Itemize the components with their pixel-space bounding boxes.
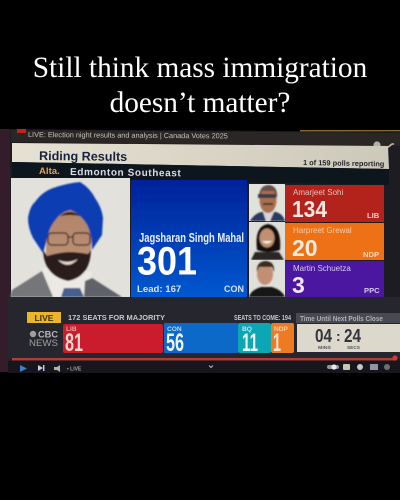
seats to come label: SEATS TO COME: 194 bbox=[234, 315, 291, 322]
title: doesn’t matter? bbox=[110, 87, 290, 119]
timer heading bbox=[296, 313, 400, 323]
header: Riding Results: Riding Results bbox=[39, 149, 127, 164]
panel: TV screen photo bbox=[0, 129, 400, 373]
CBC News logo: NEWS bbox=[29, 338, 58, 348]
glasses bbox=[48, 233, 90, 245]
mouth bbox=[58, 259, 78, 265]
candidate: Amarjeet Sohi: Amarjeet Sohi bbox=[293, 188, 343, 197]
live badge: LIVE bbox=[34, 313, 54, 323]
seat bar: LIB: LIB bbox=[66, 326, 77, 333]
timer heading: Time Until Next Polls Close bbox=[300, 316, 383, 323]
seat bar: BQ: 11 bbox=[242, 329, 258, 357]
candidate: Amarjeet Sohi: 134 bbox=[292, 196, 327, 222]
TV bezel bbox=[0, 129, 400, 373]
player controls strip bbox=[8, 361, 400, 373]
seat bar: NDP bbox=[271, 323, 294, 357]
seat bar: NDP: NDP bbox=[274, 326, 289, 333]
seat bar: NDP: 1 bbox=[273, 329, 281, 357]
face bbox=[46, 210, 92, 279]
jacket left bbox=[10, 271, 53, 297]
live badge bbox=[27, 312, 61, 323]
countdown timer: MINS bbox=[318, 345, 331, 350]
CBC News logo bbox=[29, 328, 58, 348]
countdown timer bbox=[297, 324, 400, 352]
riding name bar: Edmonton Southeast bbox=[70, 167, 182, 179]
candidate: Harpreet Grewal: NDP bbox=[363, 250, 379, 259]
candidate: Amarjeet Sohi: LIB bbox=[367, 211, 380, 220]
winner panel: Lead: 167 bbox=[137, 284, 181, 295]
header: Riding Results: 1 of 159 polls reporting bbox=[303, 158, 385, 168]
winner panel: Jagsharan Singh Mahal bbox=[139, 230, 244, 245]
seat bar: CON bbox=[164, 323, 238, 357]
candidate: Harpreet Grewal: 20 bbox=[292, 235, 318, 261]
seat bar: CON: 56 bbox=[166, 329, 184, 357]
browser tab strip: LIVE: Election night results and analysis | Canada Votes 2025 bbox=[28, 130, 228, 140]
countdown timer: 04 bbox=[315, 326, 332, 346]
seat bar: BQ bbox=[238, 323, 271, 357]
lower ticker background bbox=[8, 297, 400, 359]
tie bbox=[61, 288, 84, 297]
browser tab strip bbox=[11, 129, 400, 149]
seat bar: BQ: BQ bbox=[242, 326, 252, 333]
candidate: Martin Schuetza: 3 bbox=[292, 272, 305, 298]
candidate: Amarjeet Sohi bbox=[249, 184, 384, 222]
countdown timer: 24 bbox=[344, 326, 361, 346]
CBC News logo: CBC bbox=[38, 328, 58, 340]
player controls strip: • LIVE bbox=[67, 366, 82, 372]
dark forehead patch bbox=[60, 212, 80, 216]
header: Riding Results bbox=[12, 143, 389, 169]
title bbox=[33, 52, 368, 119]
seat bar: LIB bbox=[63, 324, 163, 357]
riding name bar bbox=[12, 162, 389, 185]
seat bar: CON: CON bbox=[167, 326, 182, 333]
winner photo bbox=[10, 178, 130, 297]
countdown timer: : bbox=[336, 328, 341, 344]
title: Still think mass immigration bbox=[33, 52, 368, 84]
candidate: Martin Schuetza: Martin Schuetza bbox=[293, 264, 351, 273]
beard bbox=[43, 250, 91, 281]
winner panel: CON bbox=[224, 284, 244, 294]
video progress bar bbox=[12, 355, 398, 361]
winner panel bbox=[131, 180, 247, 297]
jacket right bbox=[84, 278, 122, 297]
winner panel: 301 bbox=[137, 240, 197, 284]
majority label: 172 SEATS FOR MAJORITY bbox=[68, 315, 165, 322]
candidate: Harpreet Grewal bbox=[249, 222, 384, 261]
countdown timer: SECS bbox=[347, 345, 360, 350]
turban bbox=[28, 182, 103, 253]
seat bar: LIB: 81 bbox=[65, 329, 83, 357]
riding name bar: Alta. bbox=[39, 166, 60, 177]
left bezel strip bbox=[0, 129, 10, 372]
candidate: Martin Schuetza bbox=[249, 260, 384, 298]
candidate: Martin Schuetza: PPC bbox=[364, 286, 380, 295]
candidate: Harpreet Grewal: Harpreet Grewal bbox=[293, 226, 352, 235]
shirt bbox=[42, 268, 92, 297]
